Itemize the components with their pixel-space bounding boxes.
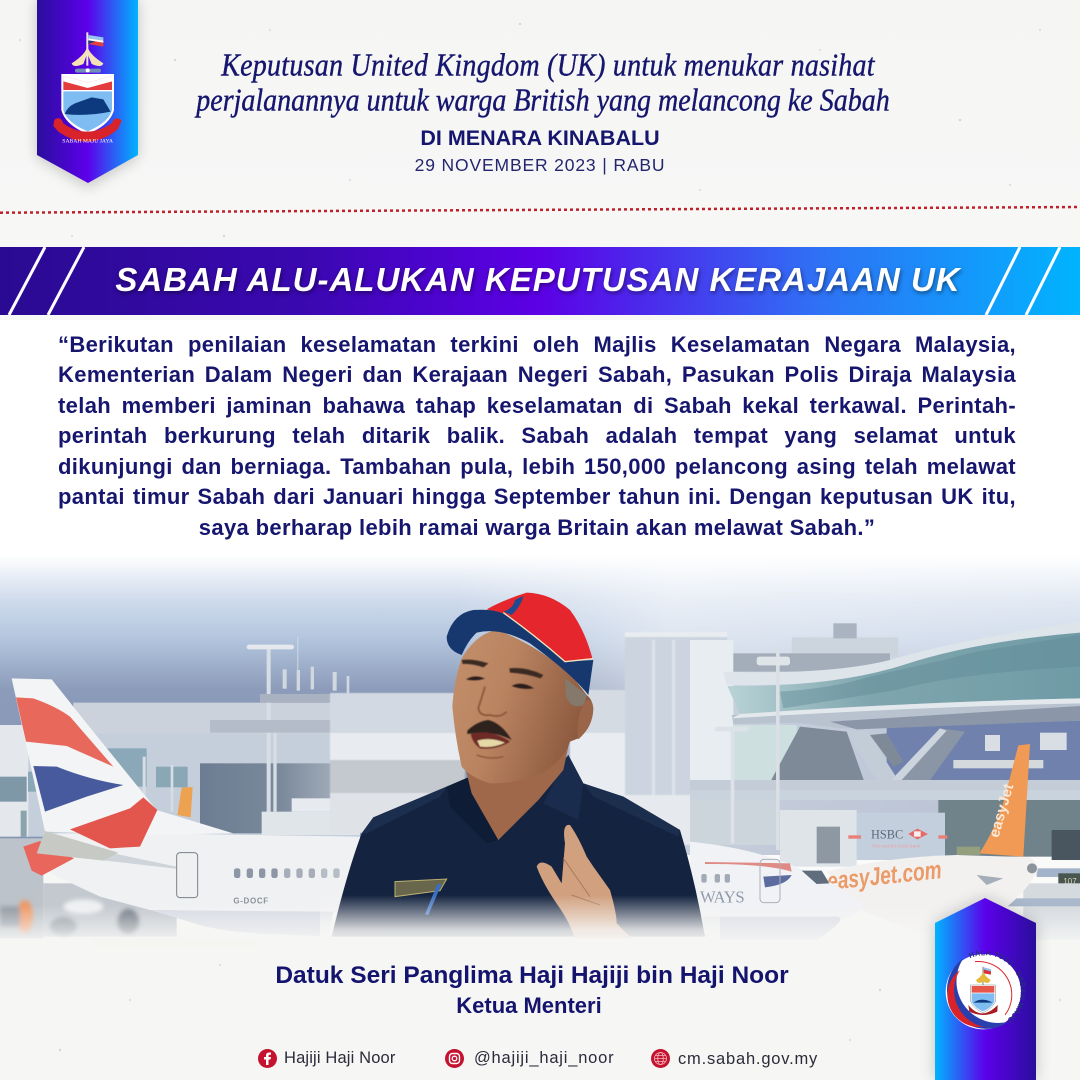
left terminal and tail plane: [0, 637, 360, 948]
white block: [0, 725, 28, 837]
quote paragraph: saya berharap lebih ramai warga Britain akan melawat Sabah.”: [199, 515, 875, 540]
quote paragraph: Kementerian Dalam Negeri dan Kerajaan Negeri Sabah, Pasukan Polis Diraja Malaysia: [58, 362, 1016, 387]
label: website: cm.sabah.gov.my: [678, 1050, 818, 1068]
right terminal, HSBC and planes: The world's local bank: [871, 844, 921, 850]
right terminal, HSBC and planes: easyJet: [986, 782, 1017, 839]
portrait: Chief Minister: [320, 592, 720, 938]
badge: Hala Tuju logo bottom right: [928, 894, 1044, 1080]
ground clutter: [0, 838, 43, 938]
rooftop building: [792, 637, 898, 657]
features: [462, 660, 543, 758]
white haze: [690, 640, 733, 807]
location line: DI MENARA KINABALU: [420, 126, 660, 150]
quote paragraph: “Berikutan penilaian keselamatan terkini oleh Majlis Keselamatan Negara Malaysia,: [58, 332, 1016, 357]
light posts: [143, 637, 349, 835]
name tag: [395, 879, 447, 897]
hand: [537, 825, 632, 938]
low annex: [262, 812, 360, 835]
ear: [577, 700, 593, 739]
far right stands: [1037, 868, 1080, 877]
support wedge: [767, 727, 867, 788]
stabiliser: [23, 841, 74, 876]
quote paragraph: [58, 332, 1016, 540]
position: Ketua Menteri: [456, 993, 602, 1018]
V struts: [847, 731, 903, 788]
label: instagram: @hajiji_haji_noor: [474, 1049, 614, 1067]
badge: Hala Tuju logo bottom right: HALA TUJU • SABAH MAJU JAYA: [968, 950, 1026, 1023]
cap crown: [487, 593, 593, 662]
windows: [234, 868, 340, 878]
right terminal, HSBC and planes: WAYS: [700, 888, 745, 907]
pen: [425, 884, 442, 915]
right terminal, HSBC and planes: HSBC: [871, 828, 903, 842]
icon: website: [651, 1049, 670, 1068]
quote paragraph: pantai timur Sabah dari Januari hingga September tahun ini. Dengan keputusan UK itu,: [58, 484, 1016, 509]
icon: facebook: [258, 1049, 277, 1068]
left glazing: [733, 725, 797, 788]
cap brim: [447, 610, 593, 695]
badge: Sabah crest top left: SABAH MAJU JAYA: [62, 139, 114, 145]
HSBC box: [857, 813, 945, 860]
label: facebook: Hajiji Haji Noor: [284, 1049, 396, 1067]
quote paragraph: perintah berkurung telah ditarik balik. Sabah adalah tempat yang selamat untuk: [58, 423, 1016, 448]
quote paragraph: telah memberi jaminan bahawa tahap keselamatan di Sabah kekal terkawal. Perintah-: [58, 393, 1016, 418]
door: [177, 853, 198, 898]
neck: [465, 747, 568, 840]
blue wall: [887, 720, 1080, 792]
photo bottom fade: [0, 905, 1080, 963]
title: script heading: Keputusan United Kingdom (UK) untuk menukar nasihat: [221, 48, 875, 84]
temple hair: [565, 678, 587, 706]
lower windows: [690, 800, 777, 845]
portrait fade: [320, 895, 720, 945]
easyJet fuselage: [827, 855, 1038, 932]
banner headline: [0, 247, 1080, 315]
curved roof: [723, 622, 1080, 685]
small tail: [177, 787, 193, 817]
dotted divider: [0, 206, 1077, 214]
date line: 29 NOVEMBER 2023 | RABU: [415, 155, 665, 175]
tail fin: [12, 678, 233, 835]
shirt: [332, 755, 705, 937]
title: script heading: perjalanannya untuk warga British yang melancong ke Sabah: [196, 83, 890, 119]
right terminal, HSBC and planes: easyJet.com: [826, 856, 943, 896]
glass band: [727, 633, 1080, 714]
BA fuselage: [690, 842, 863, 919]
banner headline: SABAH ALU-ALUKAN KEPUTUSAN KERAJAAN UK: [115, 261, 961, 298]
face: [452, 630, 593, 783]
dark glazing: [200, 763, 360, 833]
name: Datuk Seri Panglima Haji Hajiji bin Haji Noor: [275, 962, 789, 989]
easyJet tail: [979, 744, 1030, 857]
cap logo: [503, 596, 523, 615]
right terminal, HSBC and planes: [690, 622, 1080, 940]
icon: instagram: [445, 1049, 464, 1068]
footer: social links: [258, 1049, 818, 1068]
title: script heading: [194, 48, 890, 119]
roof railing: [733, 653, 890, 672]
terminal body: [27, 733, 360, 837]
right terminal, HSBC and planes: 107: [1063, 877, 1077, 886]
centre buildings and tower: [330, 632, 727, 845]
quote paragraph: dikunjungi dan berniaga. Tambahan pula, lebih 150,000 pelancong asing telah melawat: [58, 454, 1016, 479]
deck underside: [732, 700, 1080, 728]
fuselage: [43, 833, 360, 913]
rail and deck: [690, 780, 1080, 790]
badge: Sabah crest top left: [30, 0, 144, 190]
registration: G-DOCF: [233, 897, 269, 906]
roof block: [73, 703, 360, 734]
lamp posts: [776, 650, 780, 850]
